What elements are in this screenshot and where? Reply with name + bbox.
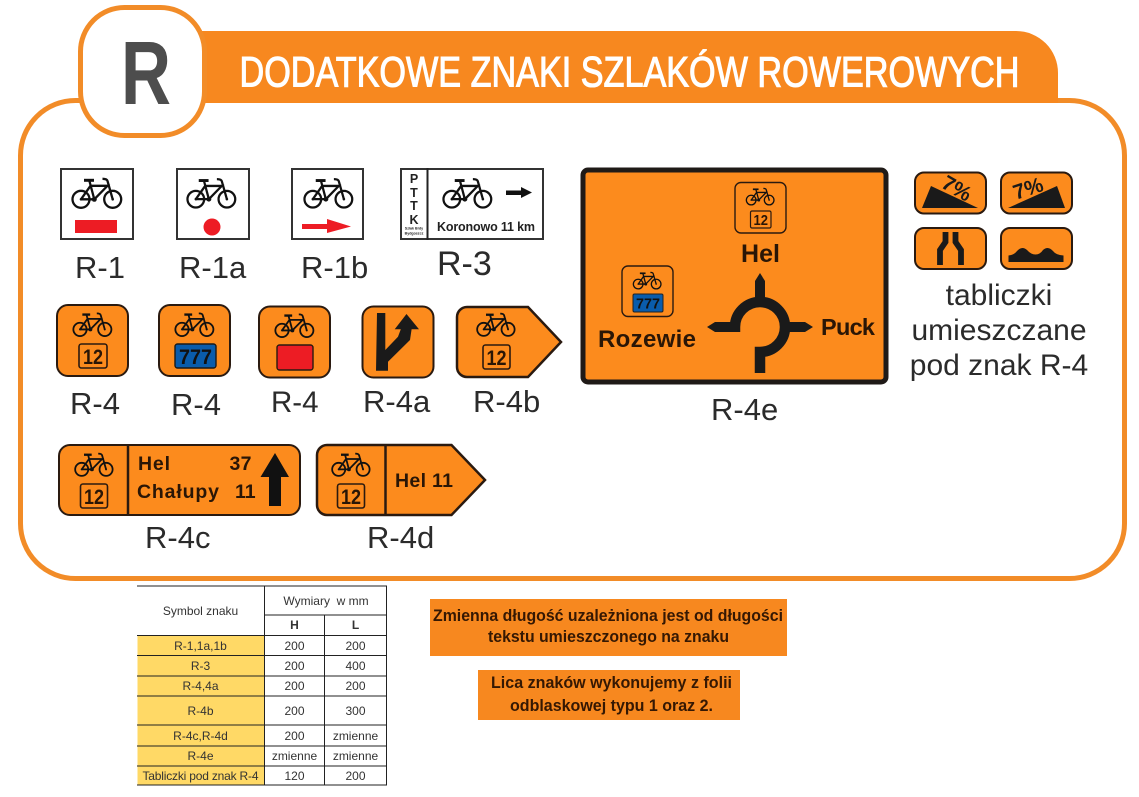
roundabout diagram [707, 273, 813, 373]
plate: descent 7%: 7% [938, 171, 976, 207]
plate: road narrowing [915, 228, 986, 269]
outer frame panel [20, 100, 1124, 578]
note: reflective film: odblaskowej typu 1 oraz 2. [510, 697, 713, 715]
dimensions table: Wymiary w mm [283, 594, 369, 608]
letter badge [80, 8, 204, 136]
sign R-3: Bydgoszcz [405, 232, 424, 236]
sign R-1b [292, 169, 363, 239]
route sign top: 12 [754, 212, 768, 229]
dimensions table: R-4c,R-4d [173, 729, 228, 743]
plates description: tabliczki [946, 279, 1052, 312]
dimensions table: R-4b [187, 704, 214, 718]
label R-4: R-4 [70, 386, 120, 421]
label R-1: R-1 [75, 250, 125, 285]
sign R-4 route 12: 12 [83, 346, 103, 369]
dimensions table: Symbol znaku [163, 604, 238, 618]
header band lower edge [190, 96, 1058, 103]
label R-4a: R-4a [363, 384, 431, 419]
sign R-4d: 12 [341, 486, 361, 509]
note: reflective film [478, 670, 740, 720]
sign R-4 route 12 [57, 305, 128, 376]
dimensions table: L [352, 618, 359, 632]
dimensions table: 400 [345, 659, 366, 673]
label R-4b: R-4b [473, 384, 540, 419]
label R-4e: R-4e [711, 392, 778, 427]
plate: ascent 7%: 7% [1010, 173, 1047, 205]
plates description: umieszczane [911, 314, 1087, 347]
note: variable length: Zmienna długość uzależniona jest od długości [433, 607, 783, 625]
route sign left: 777 [636, 296, 660, 312]
sign R-3 [401, 168, 543, 240]
route sign top [735, 182, 786, 233]
sign R-4c: 37 [230, 453, 252, 475]
dimensions table: 200 [284, 679, 305, 693]
sign R-4c: 11 [235, 481, 256, 503]
dimensions table [137, 586, 387, 785]
plate: ascent 7% [1001, 172, 1072, 214]
dimensions table: zmienne [333, 749, 379, 763]
dimensions table: R-3 [191, 659, 210, 673]
sign R-3: K [409, 213, 419, 227]
dimensions table: 200 [345, 769, 366, 783]
sign R-4c: 12 [84, 486, 104, 509]
dimensions table: 200 [345, 679, 366, 693]
dimensions table: Tabliczki pod znak R-4 [142, 769, 259, 783]
letter badge: R [121, 24, 171, 124]
note: variable length [430, 599, 787, 656]
dimensions table: 200 [284, 659, 305, 673]
sign R-4 route 777: 777 [179, 346, 212, 369]
dimensions table: H [290, 618, 299, 632]
dimensions table: zmienne [333, 729, 379, 743]
sign R-4d [317, 444, 485, 516]
dimensions table: 200 [284, 729, 305, 743]
route sign left [622, 266, 673, 316]
dimensions table: 200 [284, 704, 305, 718]
sign R-4c [59, 444, 300, 516]
sign R-4d: Hel 11 [395, 470, 453, 492]
destination Hel: Hel [741, 240, 780, 268]
sign R-3: P [410, 172, 418, 186]
sign R-4b: 12 [486, 347, 506, 370]
dimensions table: zmienne [272, 749, 318, 763]
sign R-3: T [410, 186, 418, 200]
sign R-4e roundabout [583, 170, 886, 382]
sign R-3: Szlak Brdy [405, 226, 423, 230]
destination Rozewie: Rozewie [598, 326, 696, 353]
sign R-4 red plate [259, 306, 330, 378]
sign R-3: T [410, 199, 418, 213]
label R-4c: R-4c [145, 520, 210, 555]
label R-1b: R-1b [301, 250, 368, 285]
sign R-4a [362, 306, 434, 378]
label R-4d: R-4d [367, 520, 434, 555]
plates description: pod znak R-4 [910, 349, 1088, 382]
label R-4: R-4 [171, 387, 221, 422]
plates description [910, 279, 1088, 382]
label R-1a: R-1a [179, 250, 247, 285]
note: reflective film: Lica znaków wykonujemy z folii [491, 674, 732, 692]
dimensions table: 200 [345, 639, 366, 653]
dimensions table: R-4,4a [182, 679, 219, 693]
sign R-1 [61, 169, 133, 239]
sign R-4 route 777 [159, 305, 230, 376]
label R-3: R-3 [437, 245, 492, 283]
note: variable length: tekstu umieszczonego na znaku [488, 628, 729, 646]
label R-4: R-4 [271, 386, 319, 419]
dimensions table: 120 [284, 769, 305, 783]
plate: road bumps [1001, 228, 1072, 269]
dimensions table: 200 [284, 639, 305, 653]
dimensions table: 300 [345, 704, 366, 718]
header band [190, 31, 1058, 103]
destination Puck: Puck [821, 314, 876, 340]
sign R-1a [177, 169, 249, 239]
dimensions table: R-1,1a,1b [174, 639, 227, 653]
sign R-3: Koronowo 11 km [437, 220, 535, 234]
plate: descent 7% [915, 171, 986, 214]
sign R-4c: Hel [138, 453, 170, 475]
sign R-4c: Chałupy [137, 481, 219, 503]
dimensions table: R-4e [187, 749, 214, 763]
sign R-4b [457, 307, 561, 377]
